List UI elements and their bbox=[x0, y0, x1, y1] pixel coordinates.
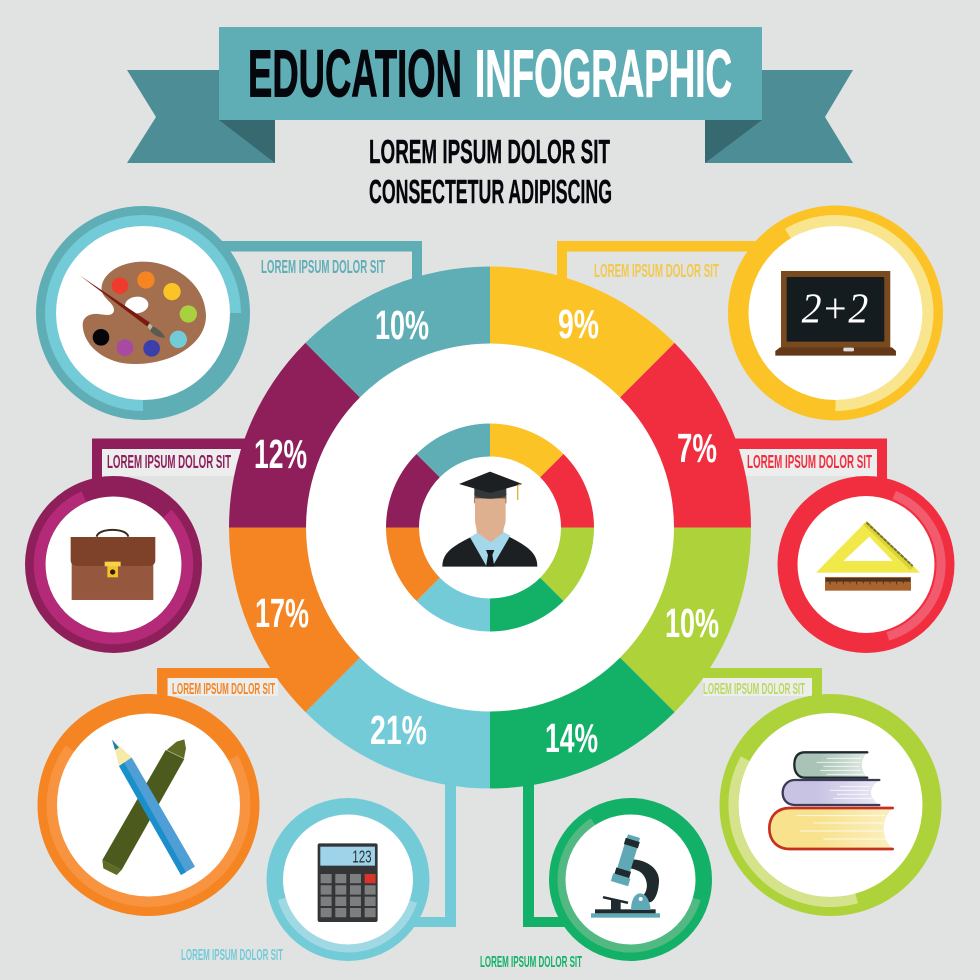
panel: microscope: LOREM IPSUM DOLOR SIT bbox=[480, 954, 582, 971]
panel: pencil and marker bbox=[38, 668, 300, 916]
panel: calculator: LOREM IPSUM DOLOR SIT bbox=[181, 947, 283, 964]
panel: calculator bbox=[181, 780, 456, 964]
icon: chalkboard bbox=[775, 271, 896, 356]
percentages: 10% bbox=[375, 302, 429, 348]
icon: calculator bbox=[318, 843, 378, 922]
panel: microscope bbox=[480, 780, 712, 971]
icon: briefcase bbox=[71, 530, 155, 600]
panel: set square and ruler bbox=[730, 438, 954, 653]
title: INFOGRAPHIC bbox=[475, 36, 732, 112]
subtitle: LOREM IPSUM DOLOR SIT bbox=[369, 133, 610, 170]
banner ribbon bbox=[127, 27, 853, 163]
label: LOREM IPSUM DOLOR SIT bbox=[107, 452, 231, 472]
label: LOREM IPSUM DOLOR SIT bbox=[747, 452, 872, 472]
percentages bbox=[254, 301, 719, 761]
icon: graduate bbox=[442, 472, 537, 567]
subtitle bbox=[369, 133, 612, 210]
icon: microscope bbox=[591, 833, 660, 918]
percentages: 17% bbox=[255, 590, 309, 636]
panel: books bbox=[690, 668, 942, 916]
inner donut ring bbox=[386, 424, 594, 632]
icon: calculator: 123 bbox=[352, 847, 372, 867]
label: LOREM IPSUM DOLOR SIT bbox=[261, 257, 385, 277]
icon: set square and ruler bbox=[816, 521, 920, 591]
percentages: 10% bbox=[665, 600, 719, 646]
percentages: 21% bbox=[370, 707, 427, 753]
main donut chart bbox=[229, 266, 751, 788]
percentages: 12% bbox=[254, 431, 307, 477]
panel: palette bbox=[36, 206, 422, 420]
icon: stack of books bbox=[769, 752, 893, 849]
panel: chalkboard bbox=[557, 206, 943, 420]
percentages: 7% bbox=[677, 425, 717, 471]
icon: paint palette bbox=[80, 262, 206, 364]
label: LOREM IPSUM DOLOR SIT bbox=[172, 681, 275, 698]
percentages: 9% bbox=[558, 301, 599, 347]
icon: pencil and marker bbox=[102, 739, 195, 875]
title: EDUCATION bbox=[248, 36, 462, 112]
label: LOREM IPSUM DOLOR SIT bbox=[594, 261, 719, 281]
icon: chalkboard: 2+2 bbox=[802, 285, 868, 332]
percentages: 14% bbox=[545, 715, 598, 761]
panel: books: LOREM IPSUM DOLOR SIT bbox=[703, 681, 805, 698]
panel: briefcase bbox=[25, 438, 250, 653]
subtitle: CONSECTETUR ADIPISCING bbox=[369, 173, 612, 210]
